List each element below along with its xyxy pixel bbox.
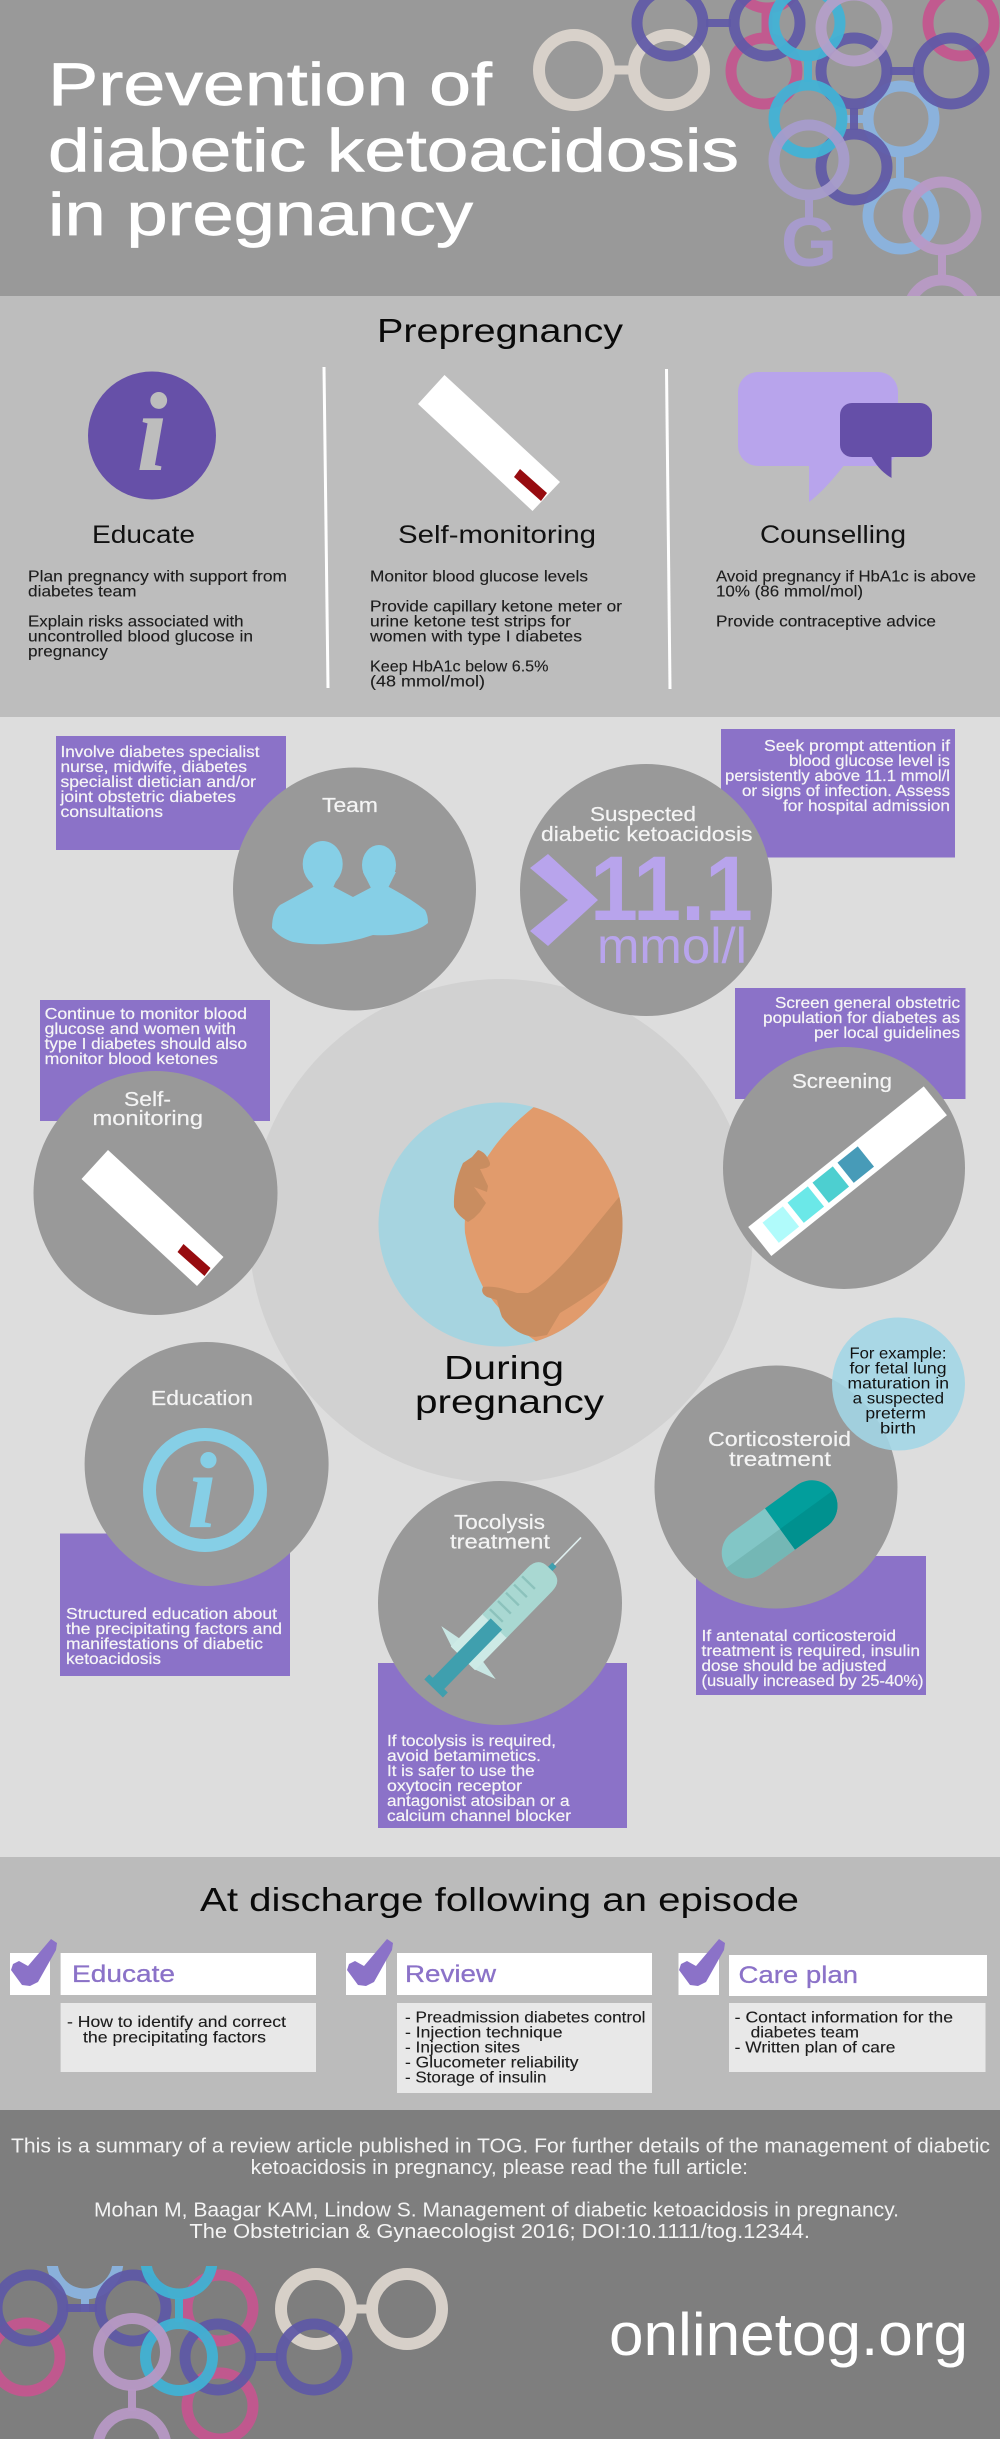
icon: speech bubbles (738, 372, 932, 502)
divider left (324, 367, 328, 688)
callout: team: joint obstetric diabetes (59, 789, 236, 806)
divider right (666, 369, 670, 689)
callout: tocolysis: If tocolysis is required, (387, 1733, 556, 1750)
text block: citation: This is a summary of a review article published in TOG. For further details of the management of diabetic (11, 2136, 990, 2158)
circle: team (233, 768, 476, 1010)
panel: during pregnancy (34, 729, 966, 1828)
circle: self-monitoring (34, 1071, 278, 1315)
card: review: - Glucometer reliability (405, 2055, 578, 2072)
panel: prepregnancy (0, 296, 1000, 717)
central circle: during pregnancy (249, 979, 753, 1483)
text block: citation: ketoacidosis in pregnancy, please read the full article: (251, 2157, 748, 2179)
text block: citation (11, 2136, 990, 2243)
card: review: - Injection sites (405, 2040, 520, 2057)
callout: tocolysis: avoid betamimetics. (387, 1748, 541, 1765)
column: self-monitoring: women with type I diabetes (369, 629, 582, 646)
card: educate: Educate (72, 1961, 175, 1988)
card: care plan: diabetes team (751, 2025, 859, 2042)
column: educate: Educate (92, 521, 195, 549)
icon: test strip (418, 375, 560, 511)
card: care plan: Care plan (738, 1962, 858, 1989)
title: Prevention of (48, 51, 492, 118)
column: self-monitoring (369, 521, 623, 691)
column: educate: pregnancy (28, 644, 108, 661)
icon: chevron (530, 854, 598, 946)
callout: education: the precipitating factors and (66, 1621, 282, 1638)
label: corticosteroid treatment (708, 1428, 851, 1471)
circle: screening: Screening (792, 1070, 892, 1093)
card: review (346, 1939, 652, 2093)
website: onlinetog.org (609, 2301, 968, 2368)
icon: information ring (150, 1432, 260, 1551)
title (48, 51, 739, 248)
callout: tocolysis: calcium channel blocker (387, 1808, 572, 1825)
circle: example note: For example: (850, 1346, 946, 1363)
card: review: - Injection technique (405, 2025, 563, 2042)
circle: team: Team (322, 794, 378, 817)
card: care plan (678, 1939, 987, 2072)
column: self-monitoring: (48 mmol/mol) (370, 674, 485, 691)
icon: two people (272, 841, 428, 944)
panel: at discharge (0, 1857, 1000, 2110)
icon: check mark (11, 1939, 57, 1986)
callout: team (56, 736, 286, 850)
callout: education: Structured education about (66, 1606, 278, 1623)
callout: self-monitoring: type I diabetes should also (45, 1036, 247, 1053)
column: self-monitoring: Monitor blood glucose levels (370, 569, 588, 586)
callout: screening (735, 988, 966, 1099)
column: self-monitoring: Self-monitoring (398, 521, 596, 549)
callout: suspected DKA: or signs of infection. Assess (742, 783, 950, 800)
icon: capsule (712, 1470, 848, 1588)
card: review: - Preadmission diabetes control (405, 2010, 646, 2027)
column: educate: diabetes team (28, 584, 136, 601)
column: self-monitoring: Provide capillary ketone meter or (370, 599, 623, 616)
circle: example note (832, 1318, 965, 1450)
callout: tocolysis: oxytocin receptor (387, 1778, 523, 1795)
card: educate (10, 1939, 316, 2072)
callout: team: nurse, midwife, diabetes (60, 759, 247, 776)
illustration: pregnant belly (378, 1102, 622, 1346)
card: educate: - How to identify and correct (67, 2014, 287, 2031)
decorative molecule rings: footer (0, 2266, 448, 2439)
callout: corticosteroid: (usually increased by 25-40%) (702, 1673, 924, 1690)
icon: check mark (679, 1939, 725, 1986)
callout: suspected DKA (721, 729, 955, 858)
circle: corticosteroid treatment (654, 1366, 898, 1608)
callout: suspected DKA: blood glucose level is (789, 753, 950, 770)
callout: corticosteroid: treatment is required, insulin (702, 1643, 920, 1660)
column: counselling: Avoid pregnancy if HbA1c is above (716, 569, 976, 586)
title: diabetic ketoacidosis (48, 117, 739, 184)
callout: education: manifestations of diabetic (66, 1636, 263, 1653)
circle: education: Education (151, 1387, 253, 1410)
callout: screening: population for diabetes as (763, 1010, 960, 1027)
card: review: - Storage of insulin (405, 2070, 546, 2087)
panel: footer (0, 2110, 1000, 2439)
circle: example note: a suspected (853, 1391, 944, 1408)
callout: corticosteroid (696, 1556, 926, 1695)
circle: example note: birth (880, 1421, 916, 1438)
column: educate: Plan pregnancy with support from (28, 569, 287, 586)
icon: information (88, 371, 216, 500)
heading: during pregnancy: pregnancy (415, 1383, 605, 1420)
heading: at discharge: At discharge following an episode (200, 1881, 799, 1918)
column: counselling: Counselling (760, 521, 906, 549)
decorative molecule rings: header (533, 0, 1000, 296)
label: corticosteroid treatment: Corticosteroid (708, 1428, 851, 1451)
icon: information ring: i (187, 1432, 217, 1551)
circle: suspected diabetic ketoacidosis: Suspected (590, 803, 696, 826)
callout: tocolysis: It is safer to use the (387, 1763, 535, 1780)
circle: tocolysis treatment: treatment (450, 1531, 550, 1554)
callout: team: Involve diabetes specialist (60, 744, 260, 761)
icon: urine test strip (748, 1086, 947, 1256)
text block: citation: Mohan M, Baagar KAM, Lindow S. Management of diabetic ketoacidosis in pregnancy. (94, 2200, 899, 2222)
column: educate (28, 521, 287, 661)
callout: education: ketoacidosis (66, 1651, 161, 1668)
column: self-monitoring: Keep HbA1c below 6.5% (370, 659, 548, 676)
circle: tocolysis treatment (378, 1481, 622, 1725)
column: educate: Explain risks associated with (28, 614, 244, 631)
column: educate: uncontrolled blood glucose in (28, 629, 253, 646)
circle: tocolysis treatment: Tocolysis (454, 1511, 545, 1534)
column: counselling: Provide contraceptive advice (716, 614, 936, 631)
title: in pregnancy (48, 181, 473, 248)
callout: corticosteroid: If antenatal corticosteroid (702, 1628, 896, 1645)
heading: during pregnancy (415, 1349, 605, 1420)
text block: citation: The Obstetrician & Gynaecologist 2016; DOI:10.1111/tog.12344. (189, 2221, 810, 2243)
callout: self-monitoring: monitor blood ketones (45, 1051, 218, 1068)
callout: team: consultations (60, 804, 163, 821)
column: counselling: 10% (86 mmol/mol) (716, 584, 863, 601)
card: care plan: - Contact information for the (735, 2010, 953, 2027)
callout: tocolysis (378, 1663, 627, 1828)
column: counselling (716, 521, 976, 631)
callout: self-monitoring (40, 1000, 270, 1121)
circle: example note: for fetal lung (850, 1361, 946, 1378)
figure: greater than 11.1 mmol/l: 11.1 (590, 838, 753, 940)
circle: self-monitoring: Self- (124, 1088, 171, 1111)
figure: greater than 11.1 mmol/l: mmol/l (597, 918, 747, 974)
callout: suspected DKA: Seek prompt attention if (764, 738, 951, 755)
circle: self-monitoring: monitoring (92, 1107, 203, 1130)
card: educate: the precipitating factors (83, 2030, 266, 2047)
callout: self-monitoring: glucose and women with (45, 1021, 236, 1038)
circle: screening (723, 1047, 965, 1289)
circle: suspected diabetic ketoacidosis (520, 764, 772, 1016)
callout: self-monitoring: Continue to monitor blood (45, 1006, 247, 1023)
column: self-monitoring: urine ketone test strips for (370, 614, 572, 631)
circle: example note: maturation in (848, 1376, 949, 1393)
icon: syringe (406, 1511, 608, 1715)
callout: suspected DKA: for hospital admission (783, 798, 950, 815)
circle: suspected diabetic ketoacidosis: diabetic ketoacidosis (541, 823, 752, 846)
decorative molecule rings: header: G (781, 203, 837, 281)
card: review: Review (405, 1961, 497, 1988)
callout: team: specialist dietician and/or (60, 774, 257, 791)
heading: prepregnancy: Prepregnancy (377, 312, 624, 349)
label: corticosteroid treatment: treatment (729, 1448, 831, 1471)
figure: greater than 11.1 mmol/l (530, 838, 753, 974)
icon: test strip (82, 1150, 224, 1286)
callout: screening: per local guidelines (814, 1025, 960, 1042)
callout: tocolysis: antagonist atosiban or a (387, 1793, 570, 1810)
heading: during pregnancy: During (444, 1349, 564, 1386)
callout: education (60, 1534, 290, 1676)
callout: corticosteroid: dose should be adjusted (702, 1658, 886, 1675)
callout: screening: Screen general obstetric (775, 995, 960, 1012)
circle: example note: preterm (865, 1406, 926, 1423)
panel: header (0, 0, 1000, 296)
icon: check mark (347, 1939, 393, 1986)
icon: information: i (136, 371, 168, 495)
circle: education (85, 1342, 329, 1586)
card: care plan: - Written plan of care (735, 2040, 896, 2057)
callout: suspected DKA: persistently above 11.1 mmol/l (725, 768, 950, 785)
